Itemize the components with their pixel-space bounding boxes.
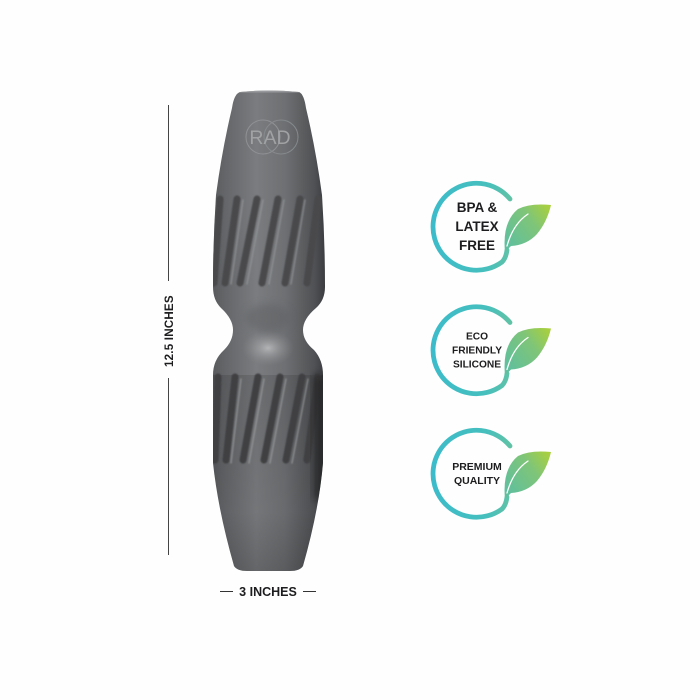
badge: BPA and latex free — [433, 183, 551, 270]
badge text: SILICONE — [453, 360, 501, 370]
leaf — [505, 204, 551, 252]
badge text: ECO — [466, 332, 488, 342]
badge text: FRIENDLY — [452, 346, 502, 356]
badge text — [452, 461, 502, 487]
badge text — [455, 200, 499, 253]
badge text: LATEX — [455, 219, 499, 234]
badge text — [452, 332, 502, 370]
right shadow — [314, 375, 326, 500]
logo: RAD — [246, 120, 298, 154]
dimension: width: 3 INCHES — [239, 585, 297, 599]
upper ribs — [214, 199, 318, 284]
dimension: width — [220, 585, 316, 599]
badge text: PREMIUM — [452, 461, 502, 473]
lower ribs — [215, 377, 318, 463]
product: massage roller — [213, 90, 325, 571]
logo: RAD: RAD — [249, 127, 291, 149]
badge: eco friendly silicone — [433, 307, 551, 394]
badge text: FREE — [459, 238, 495, 253]
leaf — [505, 452, 551, 499]
badge text: QUALITY — [454, 475, 500, 487]
badge: premium quality — [433, 430, 551, 517]
dimension: height: 12.5 INCHES — [163, 295, 176, 367]
leaf — [505, 328, 551, 376]
badge text: BPA & — [457, 200, 498, 215]
